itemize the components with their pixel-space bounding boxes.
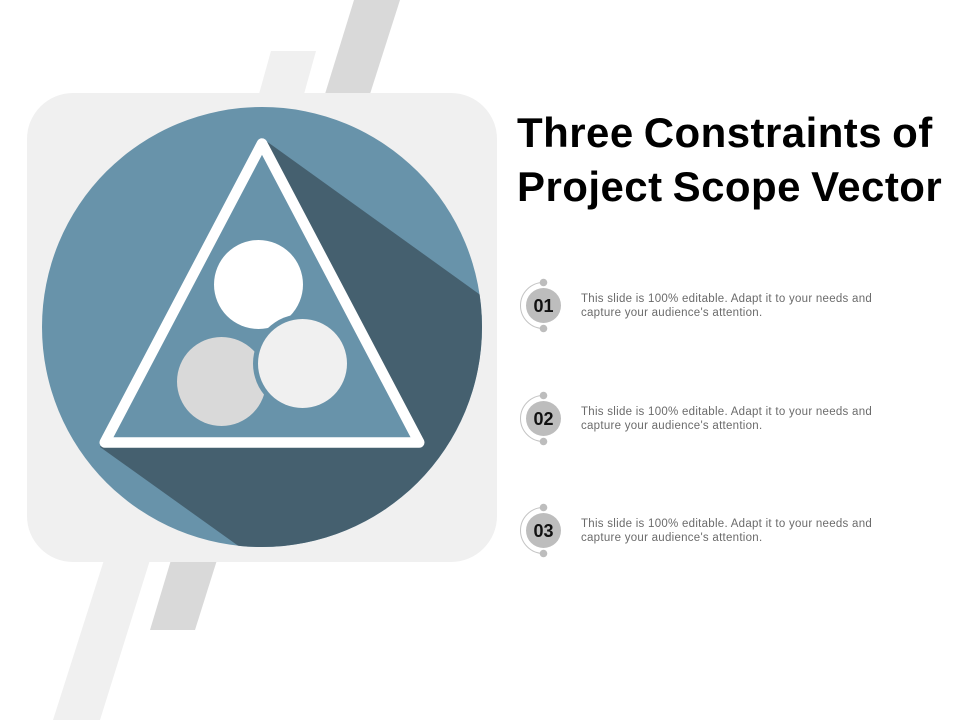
text block 02: capture your audience's attention. [581, 420, 762, 432]
main graphic [27, 0, 561, 720]
title [517, 109, 942, 210]
text block 01: This slide is 100% editable. Adapt it to your needs and [581, 293, 872, 305]
white circle [214, 240, 303, 329]
grey circle [177, 337, 266, 426]
text block 01: capture your audience's attention. [581, 307, 762, 319]
light circle [258, 319, 347, 408]
badge 03 [520, 504, 561, 557]
text block 03: This slide is 100% editable. Adapt it to your needs and [581, 518, 872, 530]
badge 03: 03 [533, 521, 554, 541]
title: Project Scope Vector [517, 163, 942, 210]
text block 02 [581, 406, 872, 432]
top dark diagonal bar [325, 0, 400, 94]
badge 02: 02 [533, 409, 554, 429]
title: Three Constraints of [517, 109, 933, 156]
text block 01 [581, 293, 872, 319]
text block 03 [581, 518, 872, 544]
badge 01 [520, 279, 561, 332]
rounded background panel [27, 93, 497, 562]
badge 01: 01 [533, 296, 554, 316]
long shadow of triangle [100, 138, 482, 547]
text block 02: This slide is 100% editable. Adapt it to your needs and [581, 406, 872, 418]
bottom dark diagonal bar [150, 560, 217, 630]
top light diagonal bar [259, 51, 316, 94]
text block 03: capture your audience's attention. [581, 532, 762, 544]
badge 02 [520, 392, 561, 445]
bottom light diagonal bar [53, 560, 150, 720]
triangle outline [105, 144, 419, 442]
blue disc [42, 107, 482, 547]
